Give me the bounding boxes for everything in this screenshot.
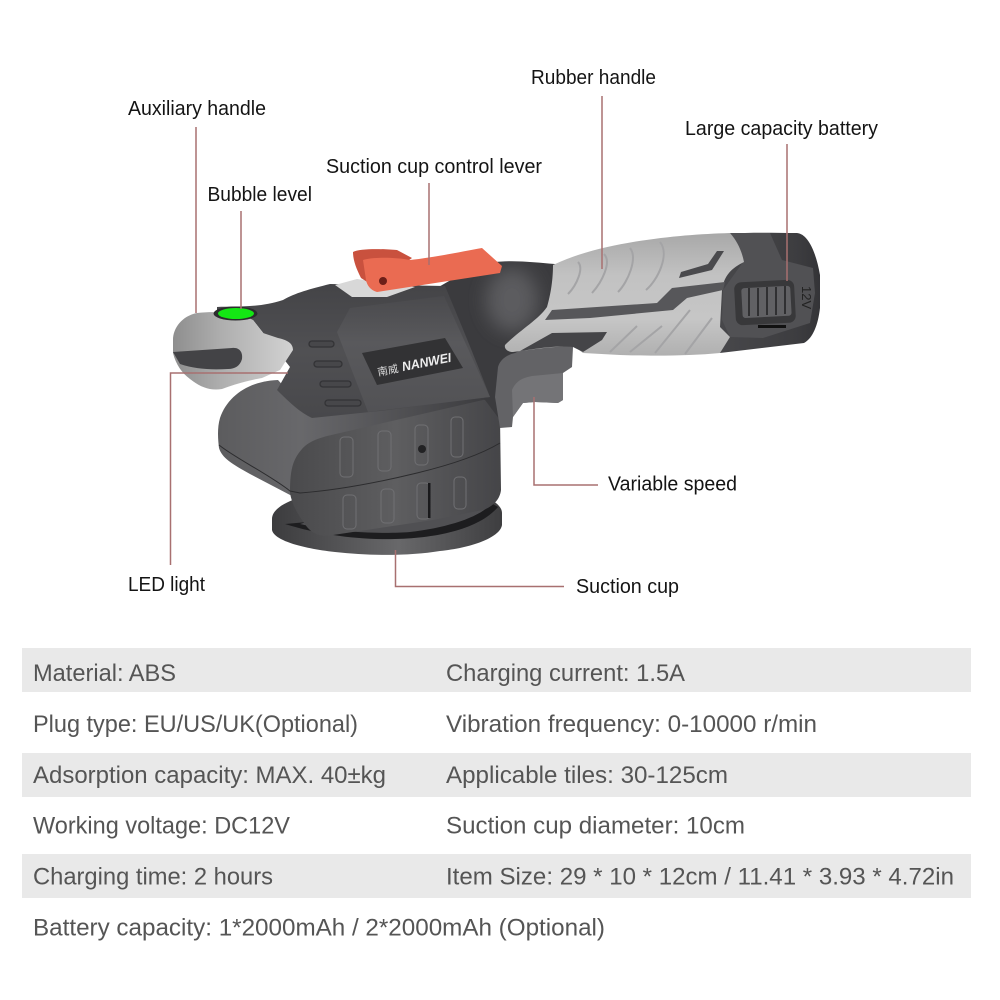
leader line: bubble level xyxy=(240,211,242,309)
label: Suction cup control lever: Suction cup control lever xyxy=(326,155,542,178)
leader line: large capacity battery xyxy=(786,144,788,281)
brand badge: 南威 xyxy=(376,361,400,380)
label: LED light: LED light xyxy=(128,573,205,596)
spec: item size: Item Size: 29 * 10 * 12cm / 11.41 * 3.93 * 4.72in xyxy=(446,864,954,890)
suction cup control lever xyxy=(353,248,502,292)
battery voltage mark: 12V xyxy=(799,286,814,309)
product: tile vibration tool xyxy=(173,233,820,555)
spec: adsorption capacity: Adsorption capacity: MAX. 40±kg xyxy=(33,762,386,789)
bubble level xyxy=(214,306,258,320)
leader line: variable speed xyxy=(534,397,598,485)
auxiliary handle xyxy=(173,312,293,390)
body vents xyxy=(309,341,361,406)
spec: working voltage: Working voltage: DC12V xyxy=(33,812,291,840)
battery latch xyxy=(734,279,796,326)
spec: plug type: Plug type: EU/US/UK(Optional) xyxy=(33,711,358,738)
spec: applicable tiles: Applicable tiles: 30-125cm xyxy=(446,762,728,789)
suction cup disc xyxy=(272,490,502,555)
spec: material: Material: ABS xyxy=(33,660,176,687)
leader line: suction cup xyxy=(396,550,564,586)
label: Large capacity battery: Large capacity battery xyxy=(685,117,879,140)
main head body xyxy=(217,284,490,418)
label: Auxiliary handle: Auxiliary handle xyxy=(128,97,266,120)
leader line: LED light xyxy=(170,373,288,565)
leader line: suction cup control lever xyxy=(428,183,430,265)
brand badge: NANWEI xyxy=(401,350,453,374)
row stripe 3 xyxy=(22,753,971,797)
specifications table xyxy=(22,648,971,942)
side body panel xyxy=(337,296,490,412)
row stripe 1 xyxy=(22,648,971,692)
spec: battery capacity: Battery capacity: 1*2000mAh / 2*2000mAh (Optional) xyxy=(33,914,605,942)
handle neck and trigger xyxy=(430,261,575,428)
label: Suction cup: Suction cup xyxy=(576,575,679,598)
label: Variable speed: Variable speed xyxy=(608,472,737,496)
grip dark inlays xyxy=(545,282,725,320)
leader line: rubber handle xyxy=(601,96,603,269)
spec: charging time: Charging time: 2 hours xyxy=(33,864,273,890)
brand badge xyxy=(362,338,463,385)
battery pack xyxy=(700,233,820,353)
label: Bubble level: Bubble level xyxy=(208,183,312,206)
rear housing xyxy=(218,380,495,500)
spec: suction cup diameter: Suction cup diameter: 10cm xyxy=(446,812,745,840)
screw hole xyxy=(418,445,426,453)
row stripe 5 xyxy=(22,854,971,898)
front housing with ribs xyxy=(219,400,501,536)
label: Rubber handle: Rubber handle xyxy=(531,66,656,89)
leader line: auxiliary handle xyxy=(195,127,197,313)
rubber handle grip xyxy=(505,233,744,356)
spec: charging current: Charging current: 1.5A xyxy=(446,660,686,687)
plate under lever xyxy=(335,279,415,297)
spec: vibration frequency: Vibration frequency: 0-10000 r/min xyxy=(446,711,817,738)
